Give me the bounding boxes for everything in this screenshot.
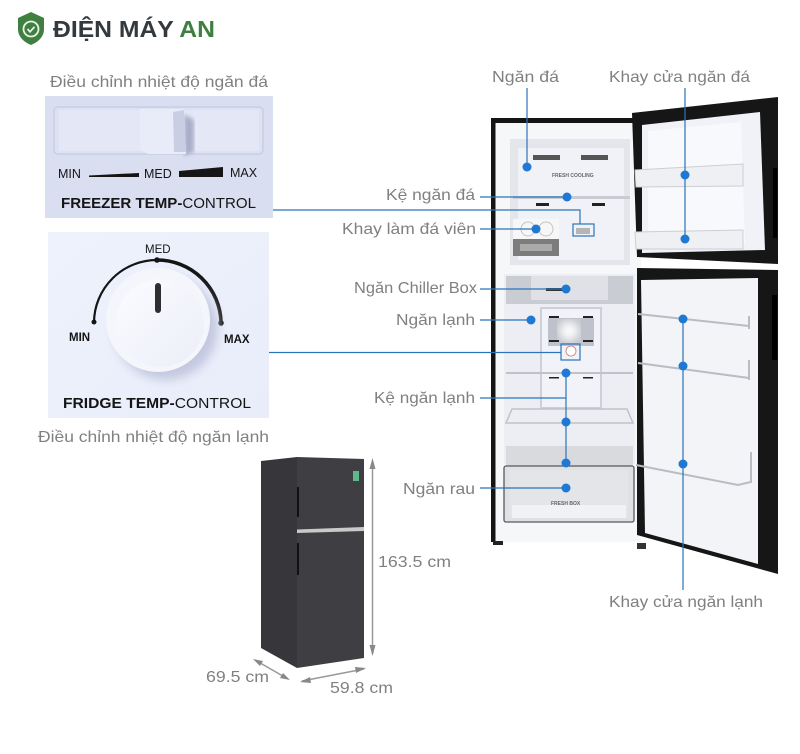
dial labels xyxy=(69,244,250,346)
dimension labels xyxy=(206,554,451,697)
callout labels: Ngăn Chiller Box xyxy=(354,280,477,297)
closed refrigerator with dimensions xyxy=(206,457,451,697)
brand name: ĐIỆN MÁY AN xyxy=(53,15,215,42)
dial labels: MED xyxy=(145,244,171,256)
dimension labels: 163.5 cm xyxy=(378,554,451,571)
vegetable drawer: FRESH BOX xyxy=(551,501,581,507)
height arrow xyxy=(370,458,376,656)
dial labels: MIN xyxy=(69,332,90,344)
width arrow xyxy=(300,667,366,683)
dial labels: MAX xyxy=(224,334,250,346)
fridge compartment xyxy=(504,274,635,466)
refrigerator front xyxy=(297,457,364,668)
slider knob xyxy=(140,109,194,156)
open refrigerator xyxy=(491,97,778,574)
scale labels: MAX xyxy=(230,166,258,180)
cabinet xyxy=(491,118,646,549)
heading: fridge temperature control: Điều chỉnh nhiệt độ ngăn lạnh xyxy=(38,429,269,446)
fridge door shelves xyxy=(638,314,749,329)
scale labels: MIN xyxy=(58,167,81,181)
callout labels: Ngăn đá xyxy=(492,69,559,86)
dial knob xyxy=(106,268,218,380)
heading: freezer temperature control: Điều chỉnh nhiệt độ ngăn đá xyxy=(50,74,268,91)
refrigerator side xyxy=(261,457,297,668)
door gap and handle xyxy=(297,471,364,575)
callout labels: Kệ ngăn lạnh xyxy=(374,390,475,407)
vegetable drawer xyxy=(504,466,634,522)
callout labels: Ngăn rau xyxy=(403,481,475,498)
scale labels: MED xyxy=(144,167,172,181)
callout lines xyxy=(269,88,685,590)
callout labels: Kệ ngăn đá xyxy=(386,187,475,204)
callout dots xyxy=(522,162,690,492)
callout labels: Ngăn lạnh xyxy=(396,312,475,329)
icon: green shield xyxy=(18,12,44,45)
freezer compartment: FRESH COOLING xyxy=(552,173,594,179)
freezer door xyxy=(632,97,778,264)
fridge door xyxy=(636,268,778,574)
freezer compartment xyxy=(510,139,630,265)
depth arrow xyxy=(253,659,290,680)
panel: fridge temperature control xyxy=(48,232,269,418)
callout labels: Khay cửa ngăn đá xyxy=(609,69,750,86)
freezer door shelves xyxy=(635,164,743,187)
dial arc xyxy=(94,260,157,322)
panel caption: FRIDGE TEMP- CONTROL xyxy=(63,395,251,412)
logo: Điện Máy An xyxy=(18,12,215,45)
dimension labels: 69.5 cm xyxy=(206,669,269,686)
callout labels: Khay làm đá viên xyxy=(342,221,476,238)
panel caption: FREEZER TEMP- CONTROL xyxy=(61,196,256,212)
callout labels: Khay cửa ngăn lạnh xyxy=(609,594,763,611)
slider track xyxy=(54,107,263,154)
panel: freezer temperature control xyxy=(45,96,273,218)
scale labels xyxy=(58,166,258,181)
dimension labels: 59.8 cm xyxy=(330,680,393,697)
callout labels xyxy=(342,69,763,611)
